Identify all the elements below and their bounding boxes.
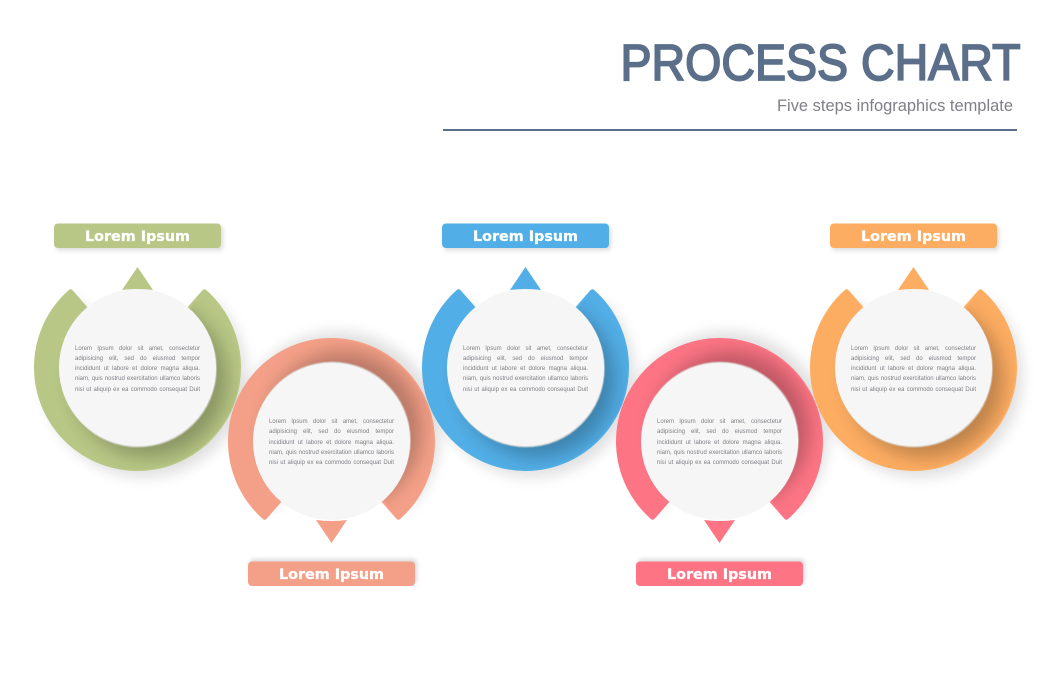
text: step 4: incididunt ut labore et dolore magna aliqua.	[657, 440, 782, 446]
label: step 3: Lorem Ipsum	[473, 229, 578, 245]
label: step 3	[442, 224, 611, 250]
subtitle: Five steps infographics template	[777, 96, 1013, 115]
ring: step 4	[618, 332, 828, 520]
arrow: step 4	[704, 520, 735, 543]
text: step 5: niam, quis nostrud exercitation ullamco laboris	[851, 376, 976, 382]
text: step 3: Lorem Ipsum dolor sit amet, consectetur	[463, 346, 588, 352]
label: step 4	[636, 559, 805, 586]
text: step 3: nisi ut aliquip ex ea commodo consequat Duit	[463, 387, 588, 393]
text: step 2: niam, quis nostrud exercitation ullamco laboris	[269, 450, 394, 456]
text: step 3: incididunt ut labore et dolore magna aliqua.	[463, 366, 588, 372]
text: step 5: Lorem Ipsum dolor sit amet, consectetur	[851, 346, 976, 352]
step 5: orange	[812, 224, 1022, 477]
text: step 4: nisi ut aliquip ex ea commodo consequat Duit	[657, 460, 782, 466]
text: step 4	[657, 417, 783, 469]
text: step 2: incididunt ut labore et dolore magna aliqua.	[269, 440, 394, 446]
title: PROCESS CHART	[620, 34, 1020, 91]
text: step 2	[269, 417, 395, 469]
label: step 1: Lorem Ipsum	[85, 229, 190, 245]
ring: step 1	[36, 289, 246, 477]
text: step 1	[75, 344, 201, 396]
text: step 3	[463, 344, 589, 396]
text: step 2: Lorem Ipsum dolor sit amet, consectetur	[269, 419, 394, 425]
text: step 4: Lorem Ipsum dolor sit amet, consectetur	[657, 419, 782, 425]
text: step 3: adipisicing elit, sed do eiusmod tempor	[463, 356, 588, 362]
text: step 1: nisi ut aliquip ex ea commodo consequat Duit	[75, 387, 200, 393]
text: step 2: nisi ut aliquip ex ea commodo consequat Duit	[269, 460, 394, 466]
text: step 3: niam, quis nostrud exercitation ullamco laboris	[463, 376, 588, 382]
label: step 1	[54, 224, 223, 250]
label: step 2: Lorem Ipsum	[279, 567, 384, 583]
step 2: salmon	[230, 332, 440, 586]
step 3: blue	[424, 224, 634, 477]
text: step 5	[851, 344, 977, 396]
text: step 2: adipisicing elit, sed do eiusmod tempor	[269, 429, 394, 435]
text: step 1: incididunt ut labore et dolore magna aliqua.	[75, 366, 200, 372]
arrow: step 1	[122, 267, 153, 290]
text: step 1: Lorem Ipsum dolor sit amet, consectetur	[75, 346, 200, 352]
text: step 5: incididunt ut labore et dolore magna aliqua.	[851, 366, 976, 372]
text: step 4: niam, quis nostrud exercitation ullamco laboris	[657, 450, 782, 456]
text: step 5: adipisicing elit, sed do eiusmod tempor	[851, 356, 976, 362]
ring: step 3	[424, 289, 634, 477]
label: step 5	[830, 224, 999, 250]
ring: step 2	[230, 332, 440, 520]
ring: step 5	[812, 289, 1022, 477]
step 1: green	[36, 224, 246, 477]
label: step 4: Lorem Ipsum	[667, 567, 772, 583]
label: step 2	[248, 559, 417, 586]
arrow: step 3	[510, 267, 541, 290]
arrow: step 2	[316, 520, 347, 543]
text: step 5: nisi ut aliquip ex ea commodo consequat Duit	[851, 387, 976, 393]
text: step 1: adipisicing elit, sed do eiusmod tempor	[75, 356, 200, 362]
label: step 5: Lorem Ipsum	[861, 229, 966, 245]
text: step 1: niam, quis nostrud exercitation ullamco laboris	[75, 376, 200, 382]
arrow: step 5	[898, 267, 929, 290]
text: step 4: adipisicing elit, sed do eiusmod tempor	[657, 429, 782, 435]
step 4: pink	[618, 332, 828, 586]
